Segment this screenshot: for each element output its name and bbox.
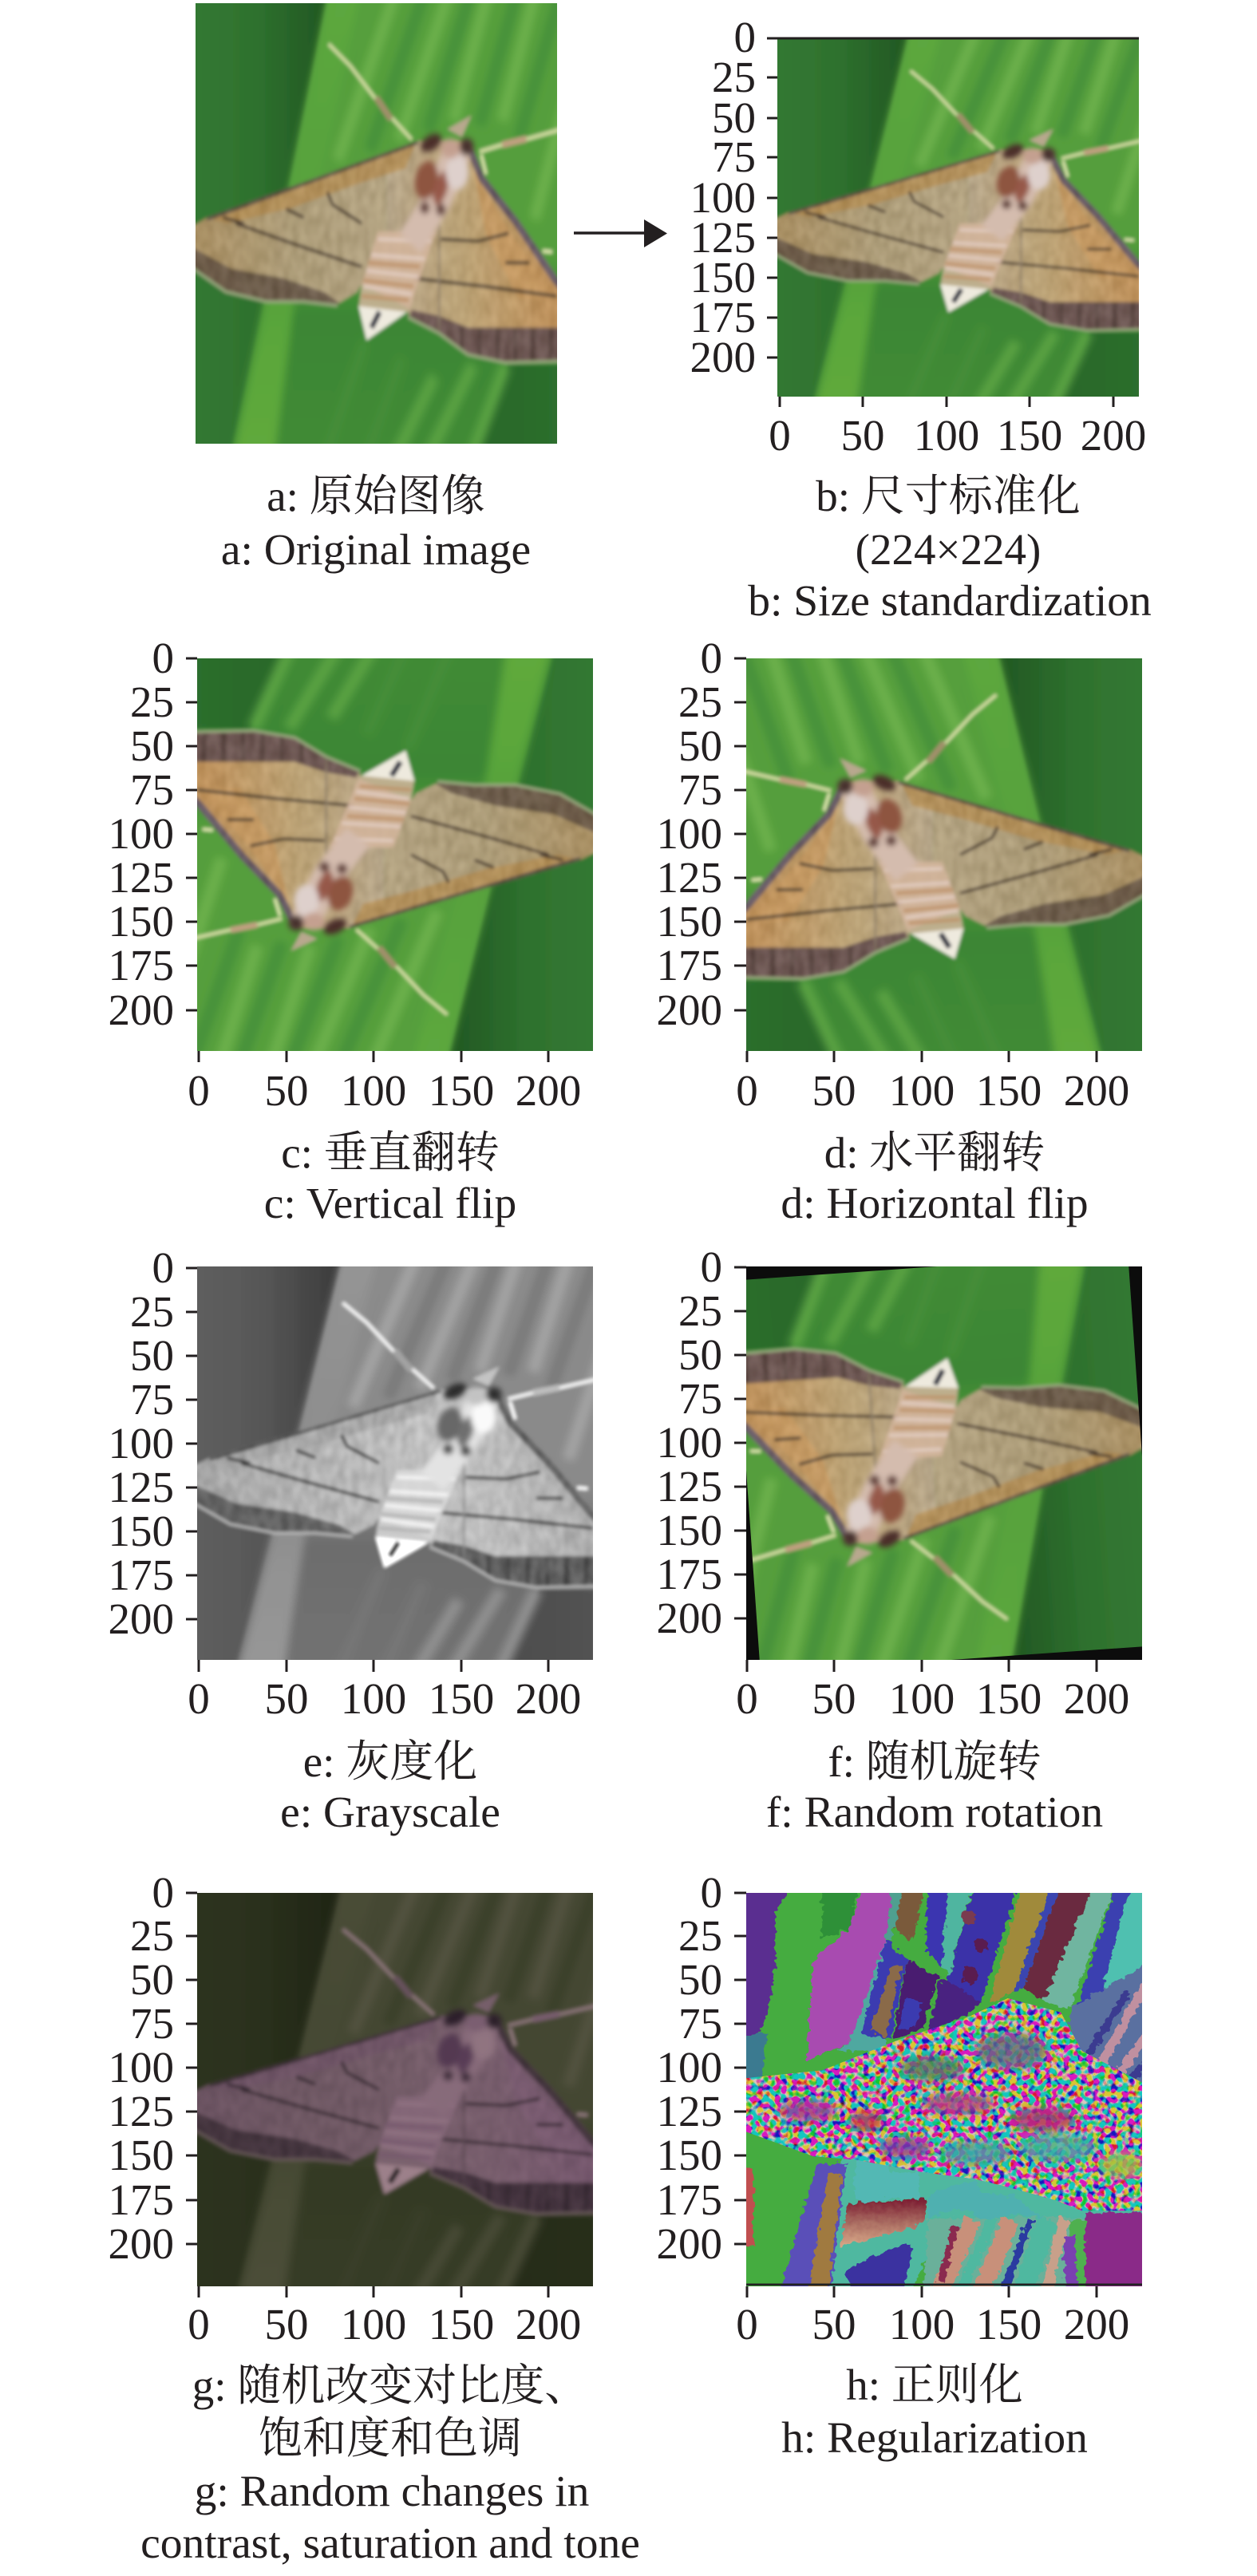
x axis f bbox=[736, 1660, 1129, 1723]
y axis c: 0 bbox=[152, 634, 174, 682]
caption g: g: Random changes in bbox=[195, 2467, 589, 2516]
x axis c: 150 bbox=[429, 1066, 494, 1115]
y axis d: 175 bbox=[656, 941, 722, 990]
y axis e: 175 bbox=[109, 1551, 174, 1599]
y axis h: 75 bbox=[678, 1999, 722, 2048]
y axis h: 25 bbox=[678, 1911, 722, 1960]
y axis d: 25 bbox=[678, 678, 722, 726]
x axis h bbox=[736, 2286, 1129, 2349]
image: darkened mauve moth bbox=[197, 1893, 593, 2286]
x axis e: 100 bbox=[341, 1674, 406, 1723]
x axis d: 0 bbox=[736, 1066, 758, 1115]
x axis f: 100 bbox=[889, 1674, 955, 1723]
y axis c: 75 bbox=[130, 765, 174, 814]
y axis g: 25 bbox=[130, 1911, 174, 1960]
y axis f: 200 bbox=[656, 1594, 722, 1642]
y axis g: 200 bbox=[109, 2219, 174, 2268]
x axis d: 200 bbox=[1064, 1066, 1129, 1115]
x axis c: 50 bbox=[265, 1066, 308, 1115]
x axis h: 150 bbox=[976, 2300, 1042, 2349]
y axis b: 175 bbox=[690, 293, 756, 342]
y axis f: 100 bbox=[656, 1418, 722, 1467]
x axis b: 200 bbox=[1081, 411, 1146, 460]
image: grayscale moth bbox=[197, 1266, 593, 1660]
caption g: 饱和度和色调 bbox=[259, 2414, 522, 2463]
caption e: e: Grayscale bbox=[280, 1788, 500, 1837]
y axis e: 200 bbox=[109, 1594, 174, 1643]
x axis d: 100 bbox=[889, 1066, 955, 1115]
image: resized moth bbox=[777, 40, 1139, 397]
y axis f: 75 bbox=[678, 1374, 722, 1423]
caption f: f: Random rotation bbox=[766, 1788, 1103, 1837]
y axis g: 100 bbox=[109, 2043, 174, 2092]
x axis b: 100 bbox=[914, 411, 979, 460]
y axis b: 200 bbox=[690, 333, 756, 381]
image: flipped moth bbox=[197, 658, 593, 1051]
caption h: h: 正则化 bbox=[846, 2361, 1023, 2409]
image: mirrored moth bbox=[746, 658, 1142, 1051]
x axis g: 50 bbox=[265, 2300, 308, 2349]
panel f: random rotation bbox=[656, 1215, 1193, 1837]
y axis d: 200 bbox=[656, 986, 722, 1034]
y axis b: 25 bbox=[712, 53, 756, 101]
x axis d: 50 bbox=[812, 1066, 856, 1115]
y axis e: 150 bbox=[109, 1507, 174, 1555]
y axis d bbox=[656, 634, 746, 1034]
x axis g: 0 bbox=[188, 2300, 210, 2349]
x axis h: 0 bbox=[736, 2300, 758, 2349]
y axis d: 100 bbox=[656, 809, 722, 858]
y axis f: 25 bbox=[678, 1286, 722, 1335]
y axis c: 175 bbox=[109, 941, 174, 990]
y axis e: 50 bbox=[130, 1331, 174, 1380]
y axis b: 0 bbox=[734, 13, 756, 61]
x axis f: 200 bbox=[1064, 1674, 1129, 1723]
caption f: f: 随机旋转 bbox=[828, 1737, 1042, 1786]
caption c: c: 垂直翻转 bbox=[281, 1128, 500, 1177]
caption e bbox=[280, 1737, 500, 1837]
caption a bbox=[221, 472, 531, 575]
y axis b: 75 bbox=[712, 132, 756, 181]
x axis e bbox=[188, 1660, 581, 1723]
y axis g: 150 bbox=[109, 2131, 174, 2179]
x axis g bbox=[188, 2286, 581, 2349]
y axis h: 175 bbox=[656, 2175, 722, 2224]
x axis b bbox=[769, 397, 1146, 460]
y axis g: 175 bbox=[109, 2175, 174, 2224]
y axis g: 125 bbox=[109, 2087, 174, 2135]
x axis g: 100 bbox=[341, 2300, 406, 2349]
y axis b: 125 bbox=[690, 213, 756, 262]
y axis c: 50 bbox=[130, 721, 174, 770]
y axis h bbox=[656, 1868, 746, 2268]
y axis c: 200 bbox=[109, 986, 174, 1034]
x axis c bbox=[188, 1051, 581, 1115]
caption h bbox=[781, 2361, 1088, 2463]
caption b: b: Size standardization bbox=[748, 577, 1152, 626]
y axis g bbox=[109, 1868, 197, 2268]
caption b: b: 尺寸标准化 bbox=[816, 472, 1081, 520]
y axis f: 0 bbox=[701, 1243, 722, 1291]
x axis f: 150 bbox=[976, 1674, 1042, 1723]
y axis c: 150 bbox=[109, 897, 174, 946]
top axis line bbox=[767, 37, 1139, 40]
x axis b: 50 bbox=[841, 411, 884, 460]
x axis f: 50 bbox=[812, 1674, 856, 1723]
y axis h: 125 bbox=[656, 2087, 722, 2135]
y axis b: 100 bbox=[690, 173, 756, 222]
x axis h: 200 bbox=[1064, 2300, 1129, 2349]
panel g: random contrast, saturation and tone bbox=[109, 1858, 640, 2568]
caption b: (224×224) bbox=[856, 525, 1041, 574]
y axis e: 0 bbox=[152, 1243, 174, 1292]
x axis e: 200 bbox=[516, 1674, 581, 1723]
caption h: h: Regularization bbox=[781, 2414, 1088, 2463]
y axis f: 175 bbox=[656, 1550, 722, 1598]
panel h: regularization bbox=[656, 1868, 1160, 2463]
y axis h: 50 bbox=[678, 1955, 722, 2004]
x axis h: 100 bbox=[889, 2300, 955, 2349]
y axis d: 150 bbox=[656, 897, 722, 946]
caption g: contrast, saturation and tone bbox=[140, 2519, 640, 2568]
y axis g: 75 bbox=[130, 1999, 174, 2048]
y axis b: 50 bbox=[712, 93, 756, 142]
y axis c bbox=[109, 634, 197, 1034]
y axis f: 150 bbox=[656, 1506, 722, 1555]
y axis f: 50 bbox=[678, 1330, 722, 1379]
y axis e: 100 bbox=[109, 1419, 174, 1468]
x axis e: 0 bbox=[188, 1674, 210, 1723]
x axis c: 200 bbox=[516, 1066, 581, 1115]
y axis e: 125 bbox=[109, 1463, 174, 1511]
panel b: size standardization bbox=[690, 6, 1171, 626]
caption d: d: 水平翻转 bbox=[824, 1128, 1045, 1177]
y axis h: 200 bbox=[656, 2219, 722, 2268]
y axis h: 150 bbox=[656, 2131, 722, 2179]
caption d: d: Horizontal flip bbox=[781, 1179, 1089, 1228]
panel d: horizontal flip bbox=[656, 623, 1177, 1228]
y axis d: 75 bbox=[678, 765, 722, 814]
caption e: e: 灰度化 bbox=[303, 1737, 477, 1786]
y axis f bbox=[656, 1243, 746, 1642]
y axis c: 100 bbox=[109, 809, 174, 858]
y axis h: 100 bbox=[656, 2043, 722, 2092]
caption g: g: 随机改变对比度、 bbox=[192, 2361, 588, 2410]
y axis f: 125 bbox=[656, 1462, 722, 1511]
panel e: grayscale bbox=[109, 1231, 628, 1837]
x axis b: 150 bbox=[997, 411, 1062, 460]
x axis b: 0 bbox=[769, 411, 791, 460]
x axis e: 50 bbox=[265, 1674, 308, 1723]
x axis d: 150 bbox=[976, 1066, 1042, 1115]
y axis b bbox=[690, 13, 777, 381]
x axis g: 200 bbox=[516, 2300, 581, 2349]
y axis g: 50 bbox=[130, 1955, 174, 2004]
y axis c: 25 bbox=[130, 678, 174, 726]
panel c: vertical flip bbox=[109, 623, 628, 1228]
x axis c: 0 bbox=[188, 1066, 210, 1115]
image: original moth on leaf bbox=[196, 3, 557, 444]
caption f bbox=[766, 1737, 1103, 1837]
x axis e: 150 bbox=[429, 1674, 494, 1723]
y axis d: 125 bbox=[656, 853, 722, 902]
y axis g: 0 bbox=[152, 1868, 174, 1917]
arrow bbox=[574, 219, 667, 247]
caption a: a: 原始图像 bbox=[267, 472, 485, 520]
y axis e: 25 bbox=[130, 1287, 174, 1336]
y axis d: 0 bbox=[701, 634, 722, 682]
y axis e bbox=[109, 1243, 197, 1643]
image: rotated moth bbox=[746, 1266, 1142, 1660]
x axis h: 50 bbox=[812, 2300, 856, 2349]
x axis g: 150 bbox=[429, 2300, 494, 2349]
x axis d bbox=[736, 1051, 1129, 1115]
caption d bbox=[781, 1128, 1089, 1228]
caption a: a: Original image bbox=[221, 526, 531, 575]
y axis e: 75 bbox=[130, 1375, 174, 1424]
panel a: original image bbox=[164, 0, 589, 575]
caption b bbox=[748, 472, 1152, 626]
caption g bbox=[140, 2361, 640, 2568]
y axis b: 150 bbox=[690, 253, 756, 302]
image: normalized false-colour moth bbox=[746, 1893, 1142, 2286]
caption c bbox=[264, 1128, 516, 1228]
x axis f: 0 bbox=[736, 1674, 758, 1723]
x axis c: 100 bbox=[341, 1066, 406, 1115]
caption c: c: Vertical flip bbox=[264, 1179, 516, 1228]
y axis d: 50 bbox=[678, 721, 722, 770]
y axis h: 0 bbox=[701, 1868, 722, 1917]
y axis c: 125 bbox=[109, 853, 174, 902]
